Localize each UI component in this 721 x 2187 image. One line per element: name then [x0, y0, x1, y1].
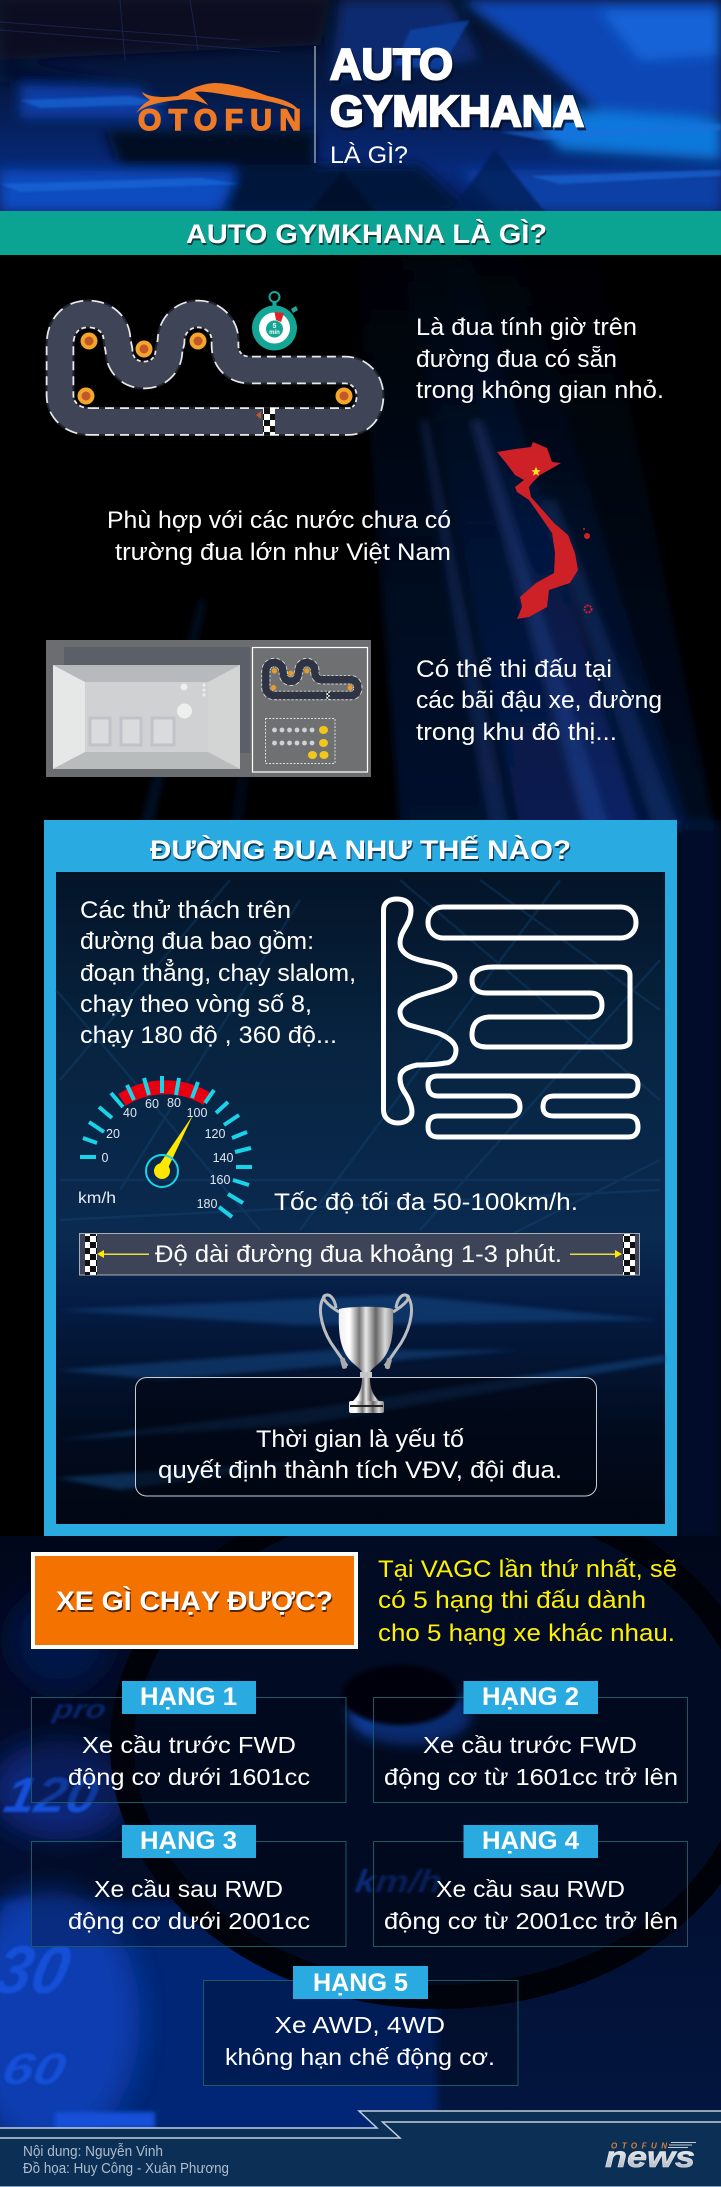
divider: [314, 46, 316, 163]
gauge labels: 100: [187, 1106, 207, 1120]
length bar: Độ dài đường đua khoảng 1-3 phút.: [155, 1241, 562, 1268]
text: definition: [416, 314, 664, 404]
background: speedometer lower section: 120: [0, 1767, 104, 1823]
card: class 3: Xe cầu sau RWD: [94, 1876, 283, 1902]
icon: parking lot with track: [46, 640, 371, 777]
text: challenges: chạy theo vòng số 8,: [80, 991, 312, 1018]
card: class 5: không hạn chế động cơ.: [225, 2044, 495, 2070]
icon: stopwatch: [252, 292, 298, 350]
card: class 2: động cơ từ 1601cc trở lên: [384, 1764, 678, 1790]
gauge labels: 60: [145, 1097, 159, 1111]
background: blue rays: [140, 255, 721, 1540]
logo: Otofun News: news: [605, 2141, 695, 2174]
card: class 1: [32, 1681, 346, 1802]
text: challenges: đoạn thẳng, chạy slalom,: [80, 958, 356, 987]
title: AUTO: [330, 40, 453, 89]
gauge labels: [102, 1096, 233, 1211]
icon: stopwatch: 5: [273, 323, 277, 330]
gauge labels: 0: [102, 1151, 109, 1165]
card: class 4: [374, 1825, 688, 1946]
callout: time: Thời gian là yếu tố: [256, 1426, 464, 1453]
icon: Vietnam map: [497, 442, 592, 619]
card: class 5: [204, 1966, 518, 2086]
gauge labels: 140: [213, 1151, 233, 1165]
text: suitable for Vietnam: Phù hợp với các nước chưa có: [107, 507, 451, 534]
text: VAGC intro: Tại VAGC lần thứ nhất, sẽ: [378, 1556, 677, 1583]
orange callout: which cars: XE GÌ CHẠY ĐƯỢC?: [56, 1585, 333, 1616]
mini track: [266, 663, 358, 700]
logo: Otofun News: OTOFUN: [611, 2142, 667, 2150]
text: venues: các bãi đậu xe, đường: [416, 687, 662, 714]
card: class 3: HẠNG 3: [140, 1827, 237, 1855]
card: class 4: động cơ từ 2001cc trở lên: [384, 1908, 678, 1934]
arrow: left: [97, 1250, 149, 1258]
length bar: [80, 1234, 640, 1275]
logo: Otofun: [136, 83, 301, 137]
text: venues: [416, 656, 662, 746]
card: class 1: HẠNG 1: [140, 1683, 237, 1711]
arrow: right: [570, 1250, 622, 1258]
gauge labels: 120: [205, 1127, 225, 1141]
background: speedometer lower section: pro: [50, 1694, 109, 1724]
title: GYMKHANA: [330, 87, 584, 136]
card: class 2: [374, 1681, 688, 1802]
text: definition: Là đua tính giờ trên: [416, 314, 637, 341]
background: speedometer lower section: [0, 1493, 721, 2150]
card: class 4: Xe cầu sau RWD: [436, 1876, 625, 1902]
card: class 4: HẠNG 4: [482, 1827, 579, 1855]
callout: time: quyết định thành tích VĐV, đội đua.: [158, 1457, 562, 1484]
text: definition: trong không gian nhỏ.: [416, 377, 664, 404]
text: definition: đường đua có sẵn: [416, 345, 617, 373]
gauge labels: 160: [210, 1173, 230, 1187]
card: class 5: Xe AWD, 4WD: [274, 2012, 445, 2038]
credits: Nội dung: Nguyễn Vinh: [23, 2143, 163, 2160]
text: challenges: đường đua bao gồm:: [80, 928, 314, 955]
text: top speed: Tốc độ tối đa 50-100km/h.: [274, 1189, 578, 1216]
icon: trophy: [320, 1295, 412, 1413]
gauge labels: 40: [123, 1106, 137, 1120]
text: VAGC intro: cho 5 hạng xe khác nhau.: [378, 1620, 675, 1647]
bridge lines: [56, 880, 660, 1240]
card: class 2: HẠNG 2: [482, 1683, 579, 1711]
building: [53, 665, 240, 769]
text: challenges: Các thử thách trên: [80, 897, 291, 924]
text: suitable for Vietnam: [107, 507, 451, 566]
card: class 3: động cơ dưới 2001cc: [68, 1908, 310, 1934]
callout: time: [136, 1378, 596, 1496]
card: class 1: động cơ dưới 1601cc: [68, 1764, 310, 1790]
icon: race track: [60, 314, 370, 435]
text: VAGC intro: có 5 hạng thi đấu dành: [378, 1587, 646, 1614]
text: venues: Có thể thi đấu tại: [416, 656, 612, 683]
text: VAGC intro: [378, 1556, 677, 1647]
panel: track: [44, 820, 677, 1536]
text: challenges: [80, 897, 356, 1049]
text: venues: trong khu đô thị...: [416, 719, 617, 746]
gauge labels: 80: [167, 1096, 181, 1110]
chart: speedometer gauge: km/h: [78, 1190, 116, 1207]
icon: stopwatch: min: [269, 330, 280, 336]
section heading band: [0, 211, 721, 255]
gauge labels: 180: [197, 1197, 217, 1211]
header banner background: [0, 0, 721, 212]
diagram: course layout: [384, 899, 638, 1137]
gauge labels: 20: [106, 1127, 120, 1141]
credits: Đồ họa: Huy Công - Xuân Phương: [23, 2160, 229, 2177]
text: suitable for Vietnam: trường đua lớn như Việt Nam: [115, 539, 451, 566]
footer: [0, 2111, 721, 2187]
card: class 2: Xe cầu trước FWD: [423, 1732, 637, 1758]
section heading band: AUTO GYMKHANA LÀ GÌ?: [186, 218, 547, 249]
card: class 3: [32, 1825, 346, 1946]
orange callout: which cars: [33, 1554, 356, 1647]
card: class 5: HẠNG 5: [313, 1969, 408, 1997]
subtitle: LÀ GÌ?: [330, 142, 408, 169]
text: challenges: chạy 180 độ , 360 độ...: [80, 1022, 337, 1049]
parking plan: [266, 718, 335, 764]
title: [330, 40, 584, 136]
background: speedometer lower section: km/h: [353, 1863, 444, 1899]
card: class 1: Xe cầu trước FWD: [82, 1732, 296, 1758]
logo: Otofun: OTOFUN: [138, 104, 301, 137]
chart: speedometer gauge: [78, 1076, 252, 1217]
credits: [23, 2143, 229, 2177]
heading: ĐƯỜNG ĐUA NHƯ THẾ NÀO?: [150, 834, 571, 865]
